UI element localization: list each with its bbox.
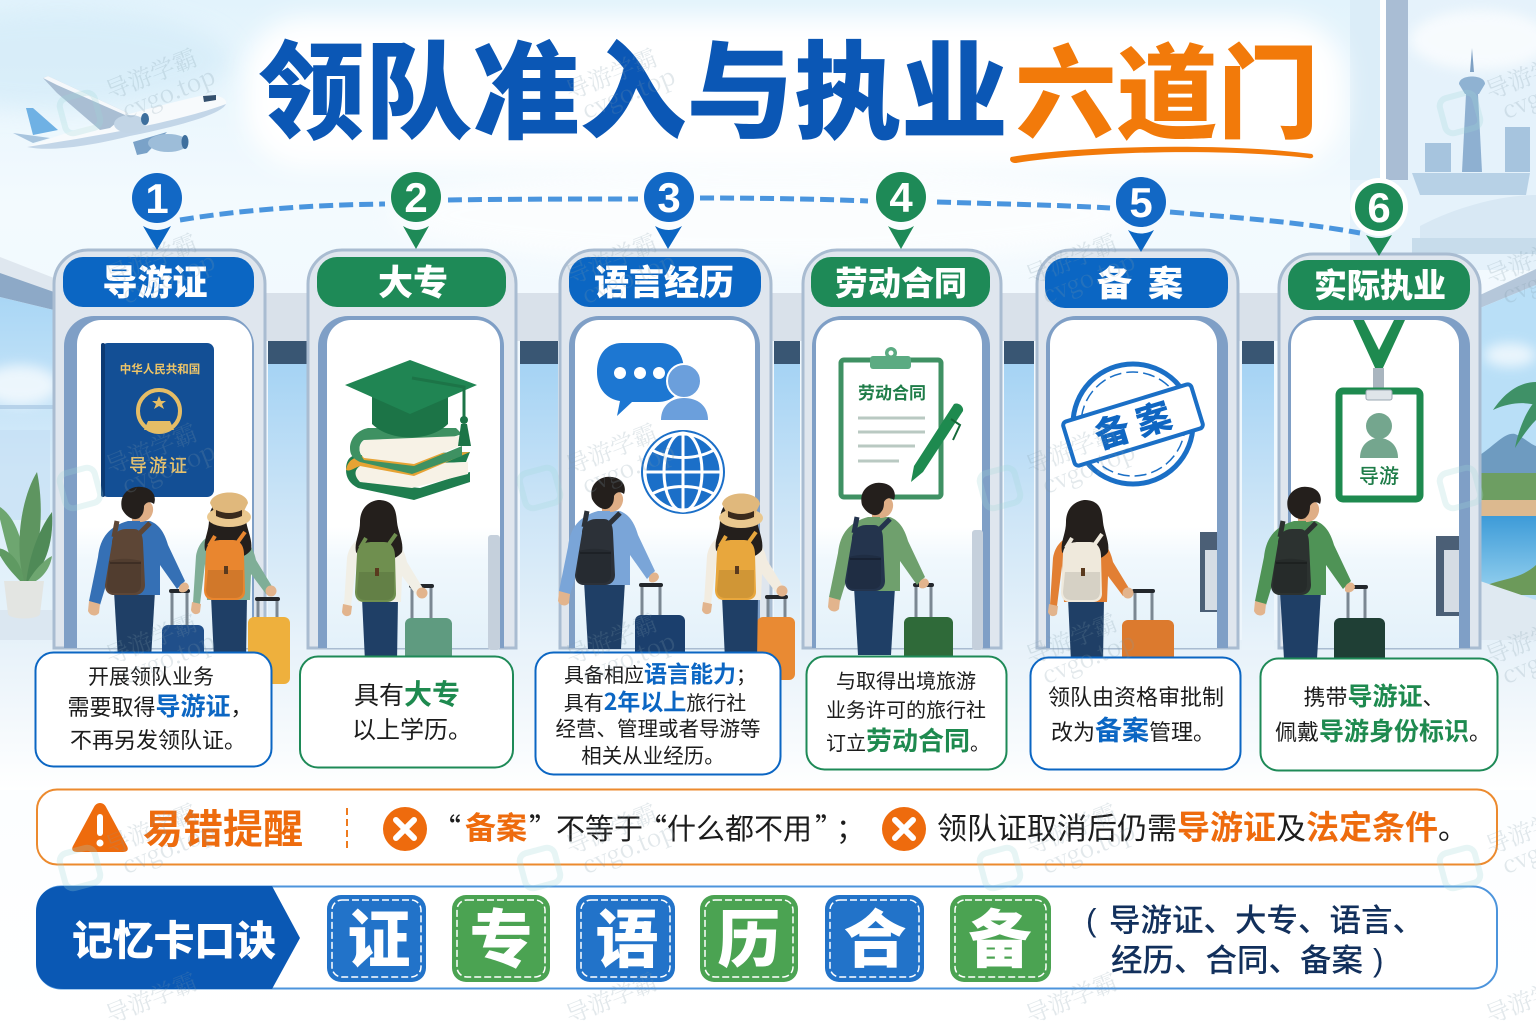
icon: airplane bbox=[13, 76, 226, 155]
watermarks: cvgo.top bbox=[116, 57, 220, 126]
tile: 历 bbox=[700, 890, 798, 982]
warning text 1: 备案 bbox=[465, 803, 527, 848]
header: 大专 bbox=[317, 255, 506, 307]
tile: 历: 历 bbox=[718, 890, 780, 981]
warning text 1: 什么都不用 bbox=[667, 806, 812, 848]
title bbox=[258, 7, 1319, 163]
tile: 专 bbox=[452, 890, 550, 982]
tile: 备: 备 bbox=[968, 890, 1032, 981]
header: 导游证: 导游证 bbox=[102, 255, 208, 306]
watermarks: 导游学霸 bbox=[1020, 223, 1122, 291]
card 2: 以上学历。 bbox=[352, 710, 472, 745]
icon: guide badge on lanyard bbox=[1339, 320, 1420, 499]
watermarks: 导游学霸 bbox=[1020, 413, 1122, 481]
tile: 证 bbox=[327, 890, 426, 982]
icon: graduation cap on books bbox=[345, 360, 477, 500]
title: 领队准入与执业 bbox=[258, 7, 1008, 161]
marker 6: 6 bbox=[1367, 184, 1391, 231]
traveller: man, blue jacket, brown bag bbox=[88, 487, 189, 659]
wall sections between gates bbox=[260, 293, 1282, 650]
card 3 bbox=[536, 652, 780, 774]
marker 2: 2 bbox=[404, 174, 428, 221]
tile: 语 bbox=[576, 890, 675, 982]
warning text 2: 领队证取消后仍需导游证及法定条件。 bbox=[937, 801, 1468, 849]
header: 备案: 备 案 bbox=[1097, 256, 1183, 307]
icon: passport: 导游证 bbox=[129, 452, 189, 478]
warning text 1: ” bbox=[529, 806, 558, 848]
mnemonic explanation: 导游证、大专、语言、 bbox=[1109, 895, 1424, 941]
watermarks: 导游学霸 bbox=[100, 38, 202, 106]
header: 导游证 bbox=[63, 255, 254, 307]
card 5: 改为备案管理。 bbox=[1051, 709, 1215, 748]
traveller: woman, orange jacket, white bag bbox=[1048, 500, 1134, 662]
card 1: 需要取得导游证， bbox=[67, 687, 253, 723]
warning text 1: “ bbox=[432, 806, 461, 848]
marker 3: 3 bbox=[657, 174, 681, 221]
watermarks: cvgo.top bbox=[1036, 622, 1140, 691]
marker 4: 4 bbox=[889, 174, 913, 221]
tile: 合 bbox=[825, 890, 924, 982]
icon: error cross 2 bbox=[882, 807, 926, 851]
card 3: 具备相应语言能力； bbox=[564, 655, 756, 689]
marker 6 bbox=[1350, 178, 1408, 256]
tile: 语: 语 bbox=[596, 890, 658, 981]
tile: 备 bbox=[950, 890, 1051, 982]
icon: passport: 中华人民共和国 bbox=[120, 361, 200, 377]
watermarks: cvgo.top bbox=[116, 622, 220, 691]
warning text 1: ” bbox=[815, 806, 844, 848]
watermarks: cvgo.top bbox=[576, 432, 680, 501]
watermarks: cvgo.top bbox=[576, 622, 680, 691]
card 3: 经营、管理或者导游等 bbox=[556, 712, 760, 742]
marker 1 bbox=[132, 173, 182, 250]
marker 4 bbox=[876, 172, 926, 249]
title white backing bbox=[245, 18, 1345, 168]
icon: passport bbox=[101, 343, 214, 497]
icon: warning triangle bbox=[72, 803, 128, 852]
watermarks: 导游学霸 bbox=[100, 603, 202, 671]
watermarks: 导游学霸 bbox=[100, 223, 202, 291]
traveller: man, green hoodie, black bag bbox=[1254, 487, 1355, 659]
gate 3: 语言经历 bbox=[560, 250, 771, 648]
watermarks: cvgo.top bbox=[576, 812, 680, 881]
card 1: 不再另发领队证。 bbox=[70, 723, 246, 755]
icon: speech bubble and person bbox=[597, 343, 708, 420]
mnemonic explanation: 经历、合同、备案 bbox=[1111, 935, 1363, 981]
card 6: 佩戴导游身份标识。 bbox=[1275, 712, 1491, 748]
card 5 bbox=[1030, 658, 1240, 770]
gate 2: 大专 bbox=[308, 250, 516, 650]
watermarks: cvgo.top bbox=[116, 812, 220, 881]
card 1 bbox=[36, 652, 272, 766]
card 4 bbox=[806, 656, 1006, 770]
card 6: 携带导游证、 bbox=[1303, 677, 1445, 713]
memory card bar bbox=[36, 886, 1497, 989]
card 3: 相关从业经历。 bbox=[581, 739, 725, 769]
watermarks: 导游学霸 bbox=[100, 793, 202, 861]
header: 劳动合同: 劳动合同 bbox=[835, 257, 967, 305]
gate 5: 备案 bbox=[1037, 250, 1238, 648]
warning text 1: ； bbox=[836, 806, 865, 848]
header: 实际执业: 实际执业 bbox=[1314, 259, 1446, 307]
card 3: 具有2年以上旅行社 bbox=[564, 683, 746, 717]
card 2: 具有大专 bbox=[354, 673, 460, 713]
warning heading: 易错提醒 bbox=[143, 797, 303, 855]
warning text 1: “ bbox=[638, 806, 667, 848]
watermarks: 导游学霸 bbox=[560, 413, 662, 481]
gate 6: 实际执业 bbox=[1279, 254, 1480, 648]
icon: error cross 1 bbox=[383, 807, 427, 851]
warning text 1: 不等于 bbox=[556, 806, 643, 848]
watermarks: 导游学霸 bbox=[1020, 603, 1122, 671]
traveller: woman, green bag bbox=[342, 500, 428, 662]
watermarks: 导游学霸 bbox=[560, 793, 662, 861]
travellers and suitcases bbox=[88, 477, 1385, 684]
mnemonic explanation: ( bbox=[1086, 902, 1097, 938]
traveller: woman in hat, orange bag bbox=[191, 492, 276, 660]
icon: contract clipboard and pen bbox=[841, 347, 963, 497]
marker 1: 1 bbox=[145, 175, 169, 222]
icon: filing stamp bbox=[1061, 364, 1204, 484]
watermarks: cvgo.top bbox=[1036, 812, 1140, 881]
warning bar bbox=[37, 790, 1497, 864]
watermarks: cvgo.top bbox=[576, 242, 680, 311]
card 1: 开展领队业务 bbox=[88, 661, 214, 691]
card 5: 领队由资格审批制 bbox=[1048, 680, 1224, 712]
watermarks: cvgo.top bbox=[1036, 242, 1140, 311]
header: 备案 bbox=[1045, 256, 1228, 308]
watermarks: 导游学霸 bbox=[1020, 793, 1122, 861]
left window with plant bbox=[0, 257, 58, 640]
mnemonic explanation: ) bbox=[1373, 942, 1384, 978]
traveller: man, light blue shirt, black bag bbox=[558, 477, 659, 649]
right window: tower, skyline and sea bbox=[1350, 0, 1536, 640]
header: 大专: 大专 bbox=[378, 255, 448, 306]
step markers bbox=[132, 172, 1408, 256]
title: 六道门 bbox=[1015, 13, 1319, 160]
icon: contract clipboard and pen: 劳动合同 bbox=[858, 379, 926, 404]
traveller: man, green jacket, navy bag bbox=[828, 483, 929, 655]
gate 4: 劳动合同 bbox=[803, 250, 1001, 650]
watermarks: cvgo.top bbox=[116, 432, 220, 501]
card 4: 与取得出境旅游 bbox=[836, 665, 976, 694]
gate 1: 导游证 bbox=[54, 250, 265, 648]
icon: globe bbox=[642, 431, 724, 513]
tile: 合: 合 bbox=[844, 890, 906, 981]
memory heading arrow bbox=[36, 886, 300, 989]
card 2 bbox=[300, 656, 513, 768]
watermarks: 导游学霸 bbox=[100, 413, 202, 481]
icon: guide badge on lanyard: 导游 bbox=[1359, 460, 1399, 489]
marker 2 bbox=[391, 172, 441, 249]
memory heading arrow: 记忆卡口诀 bbox=[72, 907, 276, 967]
watermarks: cvgo.top bbox=[116, 242, 220, 311]
suitcases, back layer bbox=[172, 586, 1365, 630]
mnemonic explanation bbox=[1086, 895, 1424, 981]
tile: 专: 专 bbox=[470, 890, 532, 981]
marker 5 bbox=[1116, 177, 1166, 252]
watermarks: 导游学霸 bbox=[560, 603, 662, 671]
watermarks: cvgo.top bbox=[576, 57, 680, 126]
dashed route between steps bbox=[180, 198, 1360, 233]
icon: filing stamp: 备 案 bbox=[1088, 388, 1177, 459]
watermarks: 导游学霸 bbox=[560, 38, 662, 106]
traveller: woman in hat, yellow bag bbox=[702, 494, 788, 660]
tile: 证: 证 bbox=[348, 890, 410, 981]
watermarks: 导游学霸 bbox=[560, 223, 662, 291]
header: 语言经历: 语言经历 bbox=[594, 255, 734, 306]
card 4: 订立劳动合同。 bbox=[826, 721, 990, 758]
card 6 bbox=[1260, 658, 1498, 770]
watermarks: cvgo.top bbox=[1036, 432, 1140, 501]
marker 3 bbox=[644, 172, 694, 249]
card 4: 业务许可的旅行社 bbox=[826, 694, 986, 723]
header: 实际执业 bbox=[1288, 259, 1470, 310]
marker 5: 5 bbox=[1129, 179, 1153, 226]
